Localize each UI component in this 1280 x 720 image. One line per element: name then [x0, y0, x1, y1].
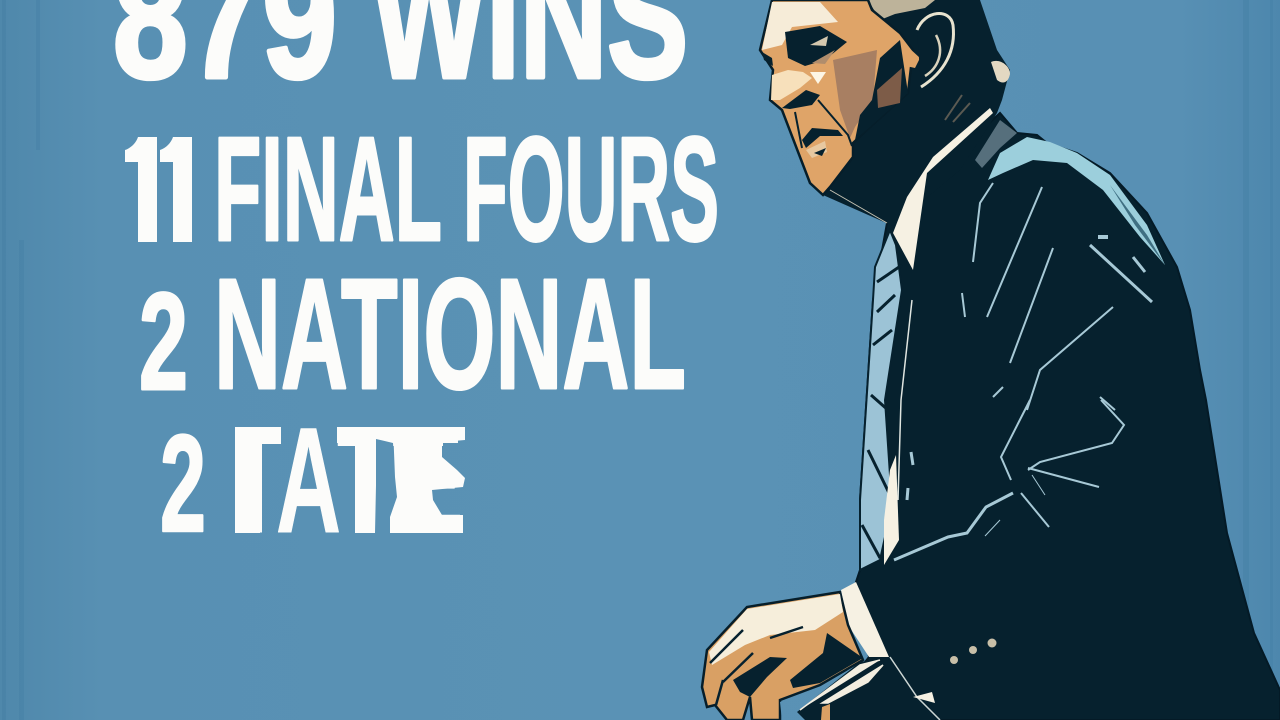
pinstripe	[898, 300, 912, 500]
jaw outline	[830, 190, 887, 223]
jacket pocket flap	[797, 658, 940, 720]
hand	[702, 592, 863, 720]
ear	[917, 14, 953, 87]
mouth	[802, 128, 843, 148]
suit jacket	[820, 113, 1280, 720]
stat: 879 wins	[113, 0, 688, 114]
stat: 2 state: A	[276, 396, 341, 564]
eye socket	[785, 26, 847, 66]
face	[760, 0, 913, 195]
knuckle shadow	[733, 657, 787, 697]
hair curl	[991, 61, 1010, 82]
top grey hair	[868, 0, 935, 20]
letter E damaged: E	[392, 396, 464, 564]
stat: 11 final fours: 11	[122, 107, 196, 272]
mouth crease	[795, 112, 802, 148]
skin by ear	[906, 47, 920, 68]
finger at pocket	[821, 704, 830, 720]
nasolabial line	[818, 100, 852, 146]
necktie	[860, 230, 902, 570]
jacket seam	[890, 657, 940, 720]
shirt sliver	[884, 455, 899, 565]
pocket lines	[800, 660, 883, 710]
letter T	[235, 396, 284, 564]
hand highlight	[709, 594, 843, 665]
stat: 2 national: 2	[139, 265, 188, 419]
under eye lid	[812, 50, 835, 64]
shoulder highlight shade	[1110, 185, 1165, 265]
eye	[810, 36, 828, 46]
lower lip	[806, 141, 827, 158]
head hair and neck	[823, 0, 1010, 226]
neck lines	[945, 95, 970, 122]
sleeve buttons	[950, 638, 996, 664]
stat: 2 state: 2	[160, 407, 206, 561]
wrist shadow	[790, 633, 863, 688]
beard stubble	[855, 40, 908, 140]
shirt cuff	[841, 582, 889, 657]
lower lip shadow	[814, 148, 826, 156]
shoulder highlight	[988, 137, 1165, 265]
tie stripes	[862, 265, 902, 558]
finger lines	[710, 627, 803, 705]
shirt tail	[913, 692, 935, 703]
collar shade	[975, 120, 1017, 168]
stat: 2 national	[139, 247, 686, 422]
letter T damaged: T	[337, 396, 395, 564]
stat: 11 final fours: FINAL	[214, 107, 442, 272]
stat: 2 national: NATIONAL	[214, 247, 686, 422]
nostril shadow	[782, 90, 820, 109]
stat: 2 state	[160, 396, 468, 564]
letter T damaged	[337, 396, 400, 564]
illustration: coach in dark suit	[702, 0, 1280, 720]
infographic canvas: FOURS	[463, 107, 719, 272]
outer eye	[762, 52, 773, 66]
cheek shadow	[833, 50, 877, 138]
forehead highlight	[762, 2, 838, 50]
ear detail	[925, 35, 940, 76]
shirt collar	[893, 108, 993, 270]
suit fold lines	[894, 183, 1152, 560]
letter T: T	[235, 396, 281, 564]
blue gap under hand	[780, 663, 860, 720]
nose highlight	[771, 70, 812, 100]
